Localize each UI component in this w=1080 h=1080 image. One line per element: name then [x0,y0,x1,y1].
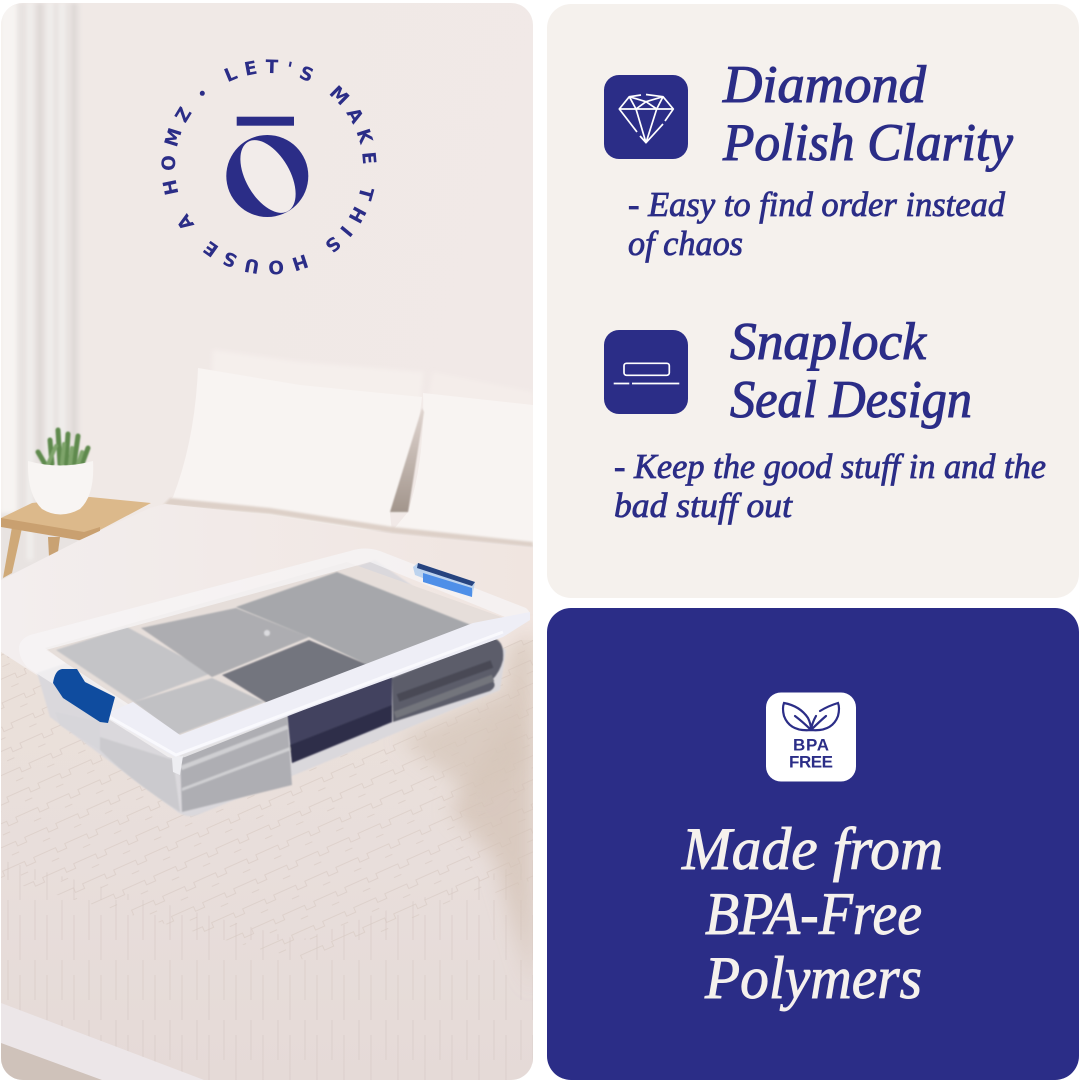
icon: diamond [604,75,688,159]
heading: made from BPA-free polymers: Polymers [704,945,922,1011]
icon: BPA free badge [766,692,856,782]
box body [37,560,506,816]
blanket side shadow [450,630,533,990]
panel: bedroom photo [1,3,533,1080]
blue right handle [413,563,475,597]
icon: BPA free badge: FREE [789,752,833,772]
folded clothes front [100,639,504,812]
panel: features [547,4,1079,598]
circular slogan: LET'S MAKE THIS HOUSE A HOMZ [161,59,376,274]
storage box [19,548,530,816]
heading: made from BPA-free polymers: BPA-Free [705,881,922,947]
heading: made from BPA-free polymers: Made from [681,816,943,882]
slogan dot [200,91,205,96]
lid rim back and sides [19,548,530,758]
lid front highlight [108,632,503,755]
text: snaplock description: bad stuff out [614,486,793,525]
text: snaplock description: - Keep the good stuff in and the [614,447,1046,486]
window floor [48,566,502,734]
logo ring [226,135,308,217]
potted plant [28,430,93,514]
icon: BPA free badge: BPA [793,736,829,754]
logo bar [237,117,294,126]
clothes top [56,572,476,735]
text: snaplock description [614,447,1046,525]
lid front band [128,612,530,746]
bed sheet [1,504,360,587]
heading: made from BPA-free polymers [681,816,943,1011]
heading: diamond polish clarity: Diamond [722,56,927,114]
logo ring opening [240,140,296,213]
brand badge [161,59,376,274]
pillow gap shadow [390,408,424,512]
curtain [0,3,80,583]
heading: diamond polish clarity: Polish Clarity [722,114,1013,172]
shadow right of box [406,694,506,787]
blanket [1,630,533,1080]
icon: snaplock [604,330,688,414]
bedside table [1,497,151,578]
text: diamond description: of chaos [628,224,743,263]
pillows [163,350,533,547]
bed frame [1,1003,204,1080]
blue left handle [53,669,115,723]
heading: diamond polish clarity [722,56,1013,172]
frame shadow [1,1043,102,1080]
text: diamond description: - Easy to find order instead [628,185,1005,224]
text: diamond description [628,185,1005,263]
heading: snaplock seal design [730,313,972,429]
heading: snaplock seal design: Snaplock [730,313,927,371]
heading: snaplock seal design: Seal Design [730,371,972,429]
panel: BPA free [547,608,1079,1080]
corner clip [172,756,183,775]
